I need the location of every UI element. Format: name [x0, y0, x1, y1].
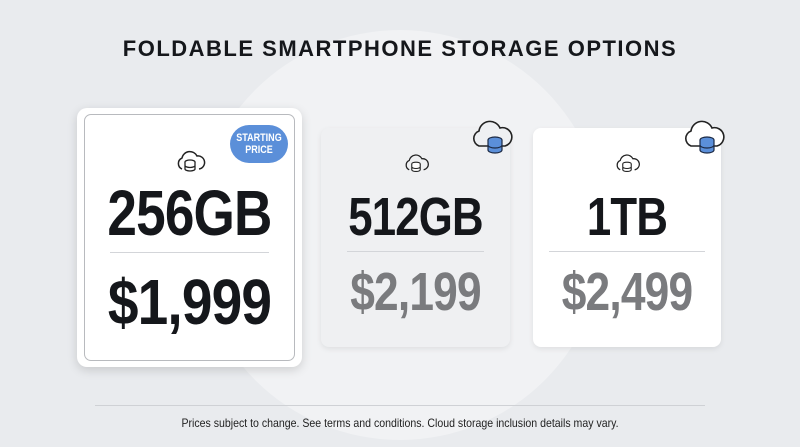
- capacity: 512GB: [348, 187, 483, 247]
- icon: cloud small: [616, 154, 640, 172]
- title: FOLDABLE SMARTPHONE STORAGE OPTIONS: [123, 36, 677, 61]
- price: $1,999: [108, 266, 271, 338]
- capacity: 256GB: [107, 177, 272, 249]
- capacity: 1TB: [587, 187, 667, 247]
- badge: starting price: STARTING: [236, 132, 282, 144]
- footer note: Prices subject to change. See terms and conditions. Cloud storage inclusion details may vary.: [181, 416, 619, 430]
- background circle: [195, 30, 605, 440]
- badge: starting price: PRICE: [245, 144, 273, 156]
- panel: 256GB: [77, 108, 302, 367]
- panel: 1TB: [533, 128, 721, 347]
- price: $2,499: [562, 262, 692, 322]
- icon: cloud badge 512: [473, 120, 513, 154]
- icon: cloud badge 1TB: [685, 120, 725, 154]
- price: $2,199: [350, 262, 481, 322]
- badge: starting price: [230, 125, 288, 163]
- icon: cloud small: [406, 154, 429, 172]
- panel: 512GB: [321, 128, 510, 347]
- icon: cloud storage: [178, 150, 206, 172]
